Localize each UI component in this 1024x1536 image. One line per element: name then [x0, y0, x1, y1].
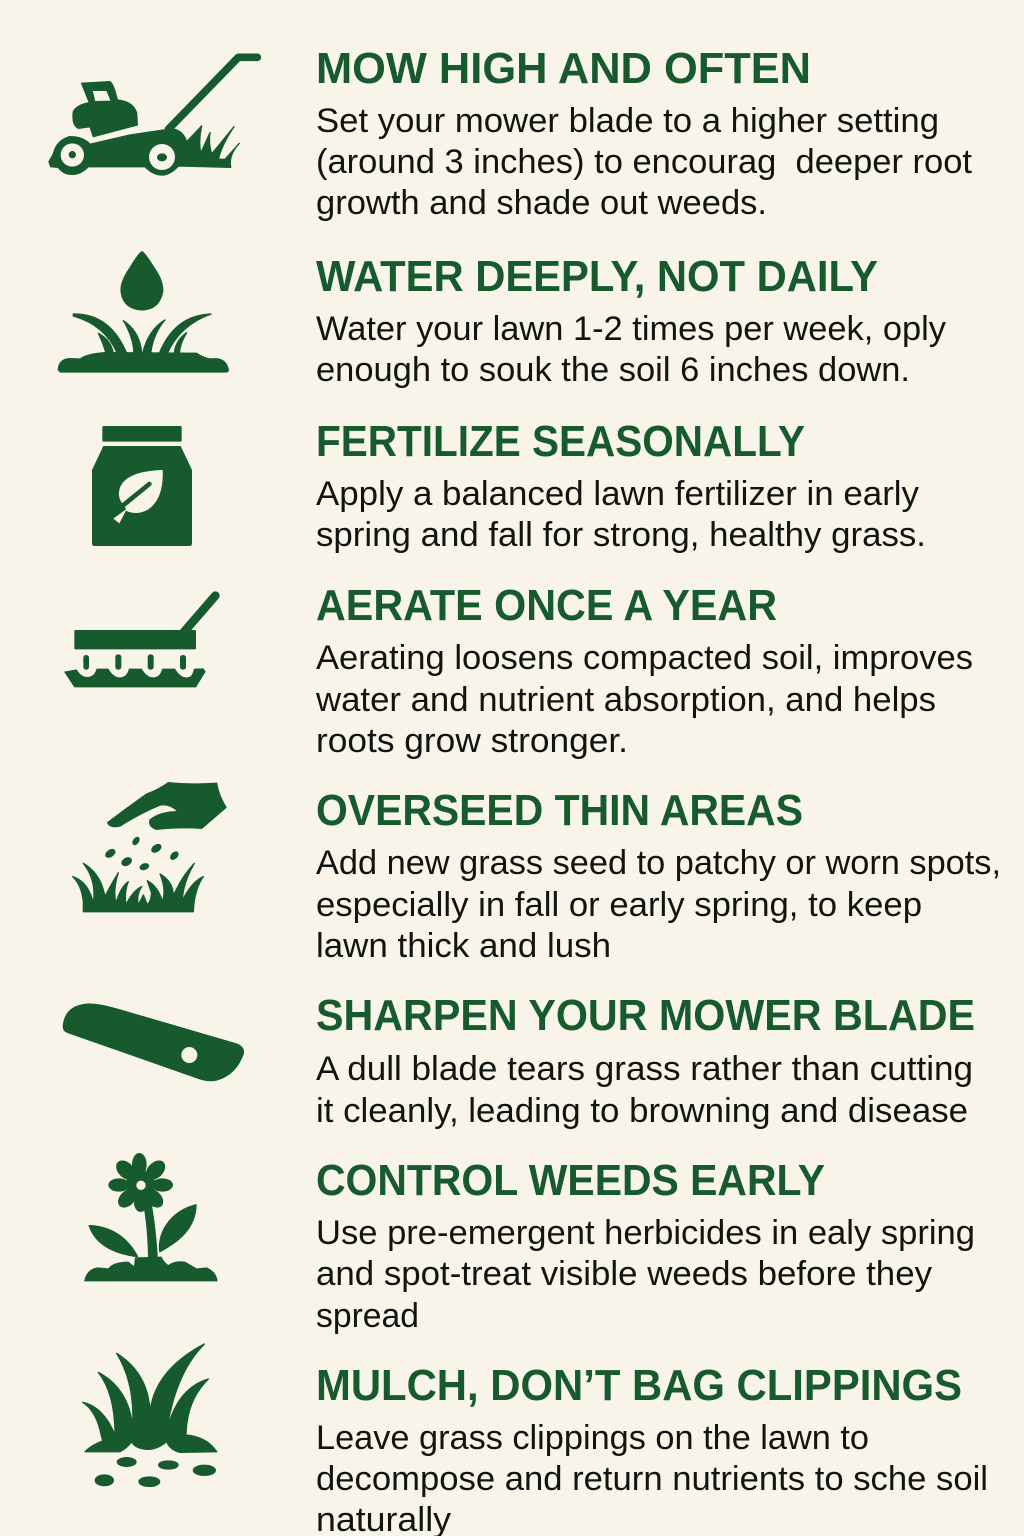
description: Set your mower blade to a higher setting: [316, 102, 939, 140]
description: [315, 639, 973, 760]
description: decompose and return nutrients to sche soil: [316, 1460, 988, 1498]
description: roots grow stronger.: [316, 722, 628, 760]
panel: control weeds early: [84, 1153, 975, 1335]
panel: mow high and often: [49, 44, 973, 222]
description: it cleanly, leading to browning and disease: [316, 1092, 968, 1130]
icon: aerator: [64, 596, 215, 687]
description: spring and fall for strong, healthy grass.: [316, 516, 926, 554]
heading: OVERSEED THIN AREAS: [316, 786, 803, 835]
heading: MOW HIGH AND OFTEN: [316, 44, 811, 93]
description: Use pre-emergent herbicides in ealy spring: [316, 1214, 975, 1252]
icon: water drop over grass: [58, 251, 229, 373]
panel: mulch, don't bag clippings: [83, 1344, 988, 1536]
panel: fertilize seasonally: [92, 417, 926, 554]
icon: weed flower: [84, 1153, 218, 1281]
description: [316, 102, 973, 222]
heading: FERTILIZE SEASONALLY: [316, 417, 805, 466]
panel: sharpen your mower blade: [63, 991, 975, 1130]
icon: mower blade: [63, 1003, 244, 1081]
description: A dull blade tears grass rather than cutting: [316, 1050, 973, 1088]
description: [316, 475, 926, 554]
description: enough to souk the soil 6 inches down.: [316, 351, 910, 389]
icon: grass with clippings: [83, 1344, 217, 1486]
heading: WATER DEEPLY, NOT DAILY: [316, 252, 878, 301]
description: especially in fall or early spring, to keep: [316, 886, 922, 924]
description: and spot-treat visible weeds before they: [316, 1255, 932, 1293]
panel: water deeply: [58, 251, 946, 389]
description: Apply a balanced lawn fertilizer in early: [316, 475, 919, 513]
description: (around 3 inches) to encourag deeper root: [316, 143, 973, 181]
heading: MULCH, DON’T BAG CLIPPINGS: [316, 1361, 962, 1410]
panel: aerate once a year: [64, 581, 973, 760]
panel: overseed thin areas: [73, 783, 1001, 965]
description: Aerating loosens compacted soil, improves: [316, 639, 973, 677]
description: spread: [316, 1297, 419, 1335]
description: [316, 1419, 988, 1536]
heading: AERATE ONCE A YEAR: [316, 581, 777, 630]
icon: hand dropping seed on grass: [73, 783, 226, 912]
description: [316, 1214, 975, 1335]
icon: lawn mower: [49, 57, 257, 175]
description: Add new grass seed to patchy or worn spots,: [316, 844, 1001, 882]
description: Leave grass clippings on the lawn to: [316, 1419, 869, 1457]
description: [316, 1050, 973, 1130]
description: lawn thick and lush: [316, 927, 611, 965]
heading: CONTROL WEEDS EARLY: [316, 1156, 825, 1205]
description: growth and shade out weeds.: [316, 184, 767, 222]
description: [316, 844, 1001, 965]
icon: fertilizer bag with leaf: [92, 426, 192, 546]
description: Water your lawn 1-2 times per week, oply: [316, 310, 946, 348]
heading: SHARPEN YOUR MOWER BLADE: [316, 991, 975, 1040]
description: water and nutrient absorption, and helps: [315, 681, 936, 719]
description: [316, 310, 946, 389]
